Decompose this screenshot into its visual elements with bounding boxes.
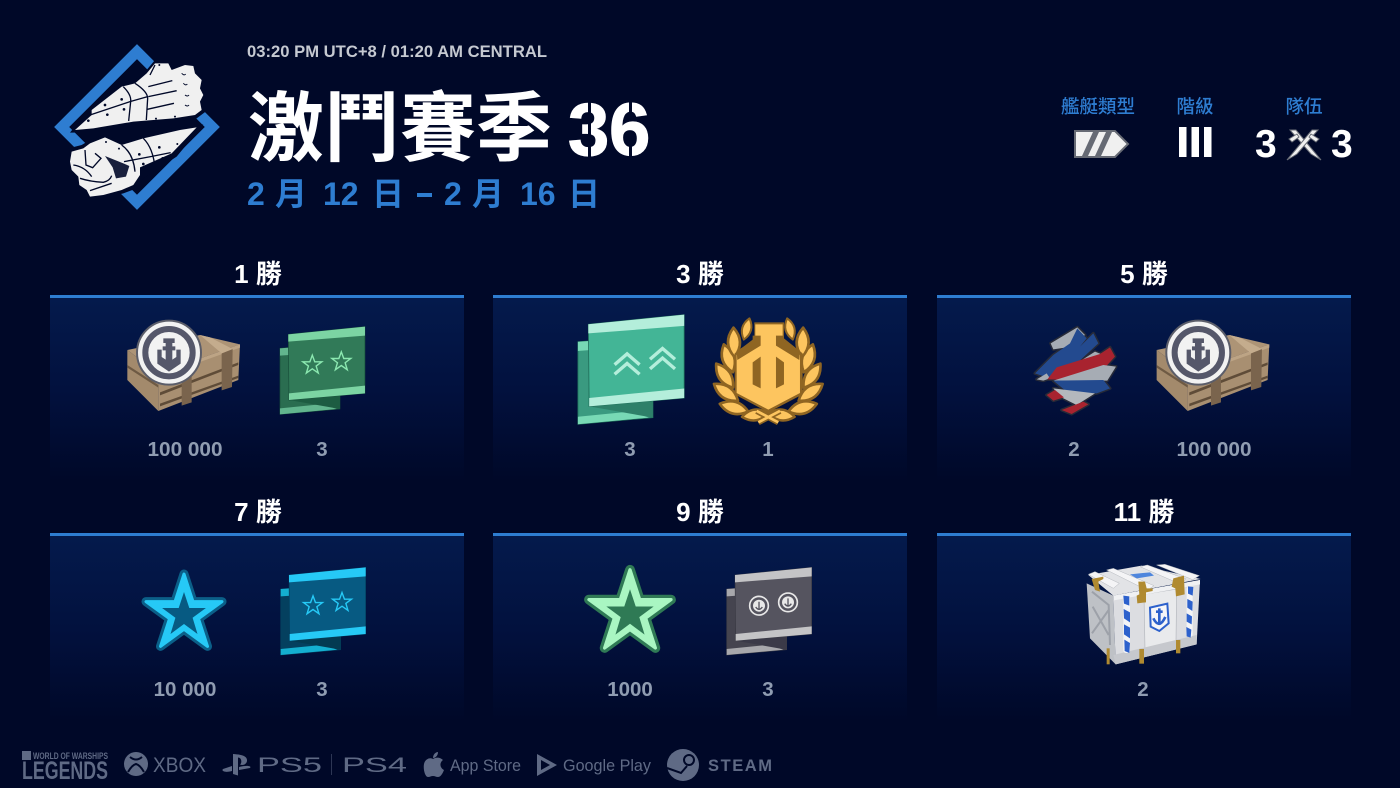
logo: App Store	[424, 752, 521, 777]
reward: gold laurel medal	[711, 317, 826, 461]
info: tier: 階級	[1176, 96, 1214, 117]
date range: 月	[275, 169, 307, 215]
panel: 11 wins: 11 勝	[1114, 497, 1174, 527]
title: 激鬥賽季	[248, 67, 552, 177]
reward: green star ribbon	[280, 327, 365, 461]
info: team size: 隊伍	[1285, 96, 1323, 117]
logo: Steam: STEAM	[708, 757, 772, 775]
reward: blue star	[146, 574, 222, 701]
info: tier	[1176, 96, 1214, 157]
icon: ship class	[1075, 131, 1128, 157]
panel: 3 wins: 3 勝	[676, 259, 724, 289]
time line: 03:20 PM UTC+8 / 01:20 AM CENTRAL	[247, 42, 547, 61]
panel: 7 wins	[50, 497, 464, 722]
logo: PlayStation 5 and 4	[222, 754, 408, 777]
logo: World of Warships Legends: WORLD OF WARSHIPS	[33, 751, 108, 761]
title: 36	[568, 88, 650, 171]
date range: 月	[472, 169, 504, 215]
reward: credits crate	[1157, 321, 1269, 461]
panel: 1 win	[50, 259, 464, 482]
info: ship type	[1061, 96, 1135, 157]
reward: blue star: 10 000	[154, 678, 216, 701]
reward: premium white crate: 2	[1137, 678, 1149, 701]
footer: platform logos	[22, 749, 772, 785]
reward: blue star ribbon: 3	[316, 678, 328, 701]
logo: Xbox	[124, 752, 206, 777]
info: team size	[1255, 96, 1353, 166]
logo: Google Play	[537, 754, 651, 776]
reward: credits crate	[127, 321, 240, 461]
reward: green star ribbon: 3	[316, 438, 328, 461]
reward: grey coin ribbon: 3	[762, 678, 774, 701]
date range: 16	[520, 176, 556, 212]
icon: tier III	[1179, 127, 1212, 157]
logo: World of Warships Legends: LEGENDS	[22, 757, 108, 785]
panel: 3 wins	[493, 259, 907, 482]
logo: Xbox: XBOX	[153, 754, 206, 777]
reward: credits crate: 100 000	[148, 438, 222, 461]
date range	[247, 169, 600, 215]
panel: 5 wins: 5 勝	[1120, 259, 1168, 289]
reward: credits crate: 100 000	[1176, 438, 1252, 461]
reward: teal chevron ribbon: 3	[624, 438, 636, 461]
logo: World of Warships Legends	[22, 751, 108, 785]
logo: Google Play: Google Play	[563, 756, 651, 775]
logo: Steam	[667, 749, 772, 781]
date range: 12	[323, 176, 359, 212]
reward: camouflage flag	[1035, 327, 1116, 461]
info: team size: 3	[1255, 123, 1277, 166]
emblem: crossed gauntlets in blue diamond	[62, 52, 212, 202]
panel: 7 wins: 7 勝	[234, 497, 282, 527]
panel: 5 wins	[937, 259, 1351, 482]
date range: 日	[372, 169, 404, 215]
logo: PlayStation 5 and 4: PS4	[342, 754, 408, 777]
reward: green star: 1000	[607, 678, 653, 701]
reward: premium white crate	[1087, 564, 1201, 701]
blue shield	[1150, 604, 1169, 631]
date range: 2	[247, 176, 265, 212]
reward: teal chevron ribbon	[578, 315, 684, 461]
logo: App Store: App Store	[450, 757, 521, 775]
info: ship type: 艦艇類型	[1061, 96, 1135, 117]
logo: PlayStation 5 and 4: PS5	[257, 754, 322, 777]
reward: gold laurel medal: 1	[762, 438, 774, 461]
date range: 2	[444, 176, 462, 212]
panel: 1 win: 1 勝	[234, 259, 282, 289]
reward: grey coin ribbon	[727, 567, 812, 701]
clasps	[1092, 576, 1185, 664]
panel: 9 wins	[493, 497, 907, 722]
reward: green star	[589, 570, 671, 701]
blue stripes	[1123, 596, 1130, 653]
panel: 9 wins: 9 勝	[676, 497, 724, 527]
reward: blue star ribbon	[281, 567, 366, 701]
reward: camouflage flag: 2	[1068, 438, 1080, 461]
info: team size: 3	[1331, 123, 1353, 166]
panel: 11 wins	[937, 497, 1351, 722]
date range: 日	[568, 169, 600, 215]
icon: crossed swords	[1287, 130, 1321, 160]
